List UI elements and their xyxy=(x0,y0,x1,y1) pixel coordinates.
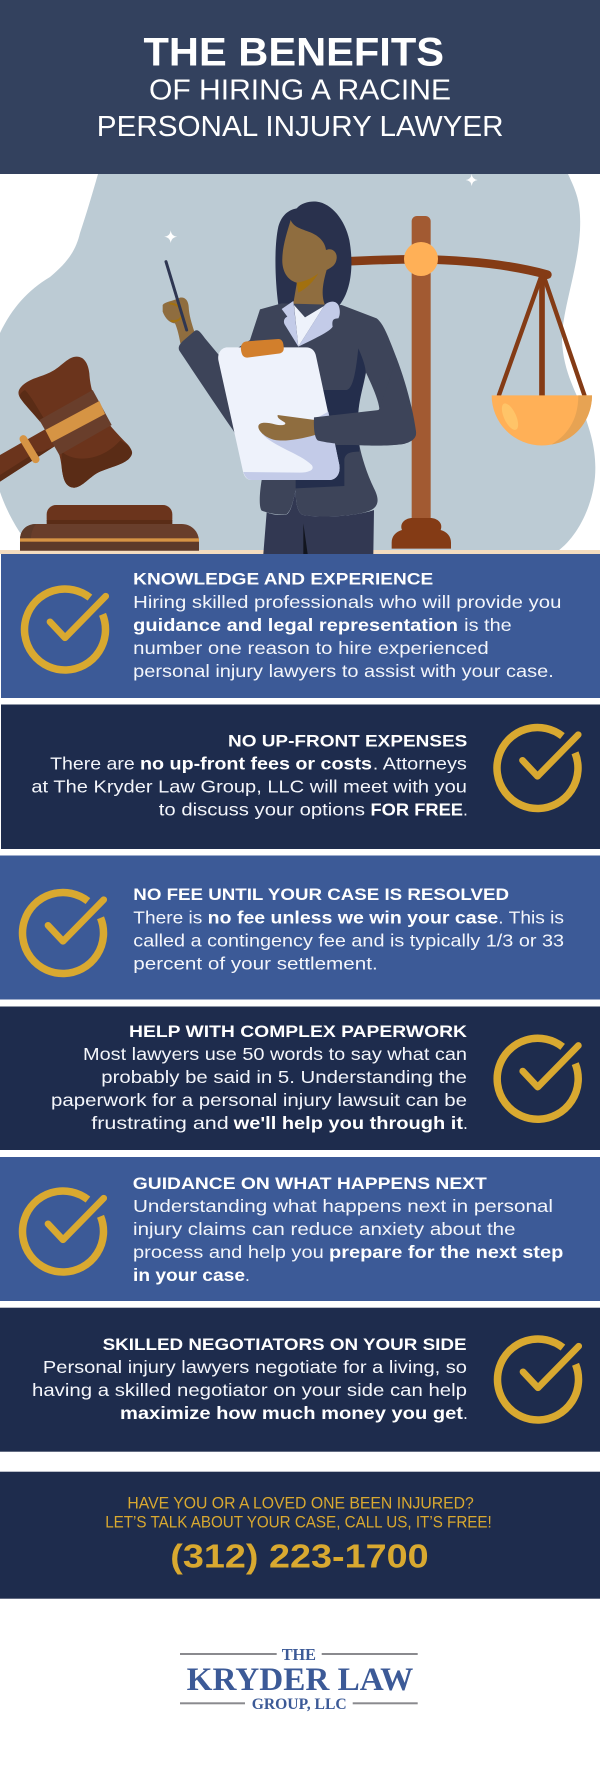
heading: GUIDANCE ON WHAT HAPPENS NEXT xyxy=(133,1174,487,1193)
logo: The Kryder Law Group: KRYDER LAW xyxy=(187,1662,413,1698)
header banner xyxy=(0,0,600,174)
icon: check circle xyxy=(497,727,578,808)
figure: lawyer with clipboard xyxy=(163,202,416,554)
panel: no up-front expenses xyxy=(1,704,600,849)
body text xyxy=(51,1044,468,1133)
icon: scales of justice xyxy=(347,216,592,549)
icon: sparkle left xyxy=(164,230,177,243)
icon: check circle xyxy=(22,892,104,973)
heading: HELP WITH COMPLEX PAPERWORK xyxy=(129,1022,468,1041)
body text: at The Kryder Law Group, LLC will meet with you xyxy=(31,777,467,797)
body text: no fee unless we win your case xyxy=(208,907,499,927)
body text: Understanding what happens next in personal xyxy=(133,1196,553,1216)
body text: . xyxy=(463,1113,468,1133)
body text: . Attorneys xyxy=(373,754,467,774)
body text: maximize how much money you get xyxy=(120,1403,463,1423)
subtitle line 1: OF HIRING A RACINE xyxy=(149,75,451,107)
body text: having a skilled negotiator on your side can help xyxy=(32,1380,467,1400)
body text: we'll help you through it xyxy=(233,1113,463,1133)
body text: frustrating and xyxy=(91,1113,229,1133)
body text xyxy=(133,592,561,681)
icon: check circle xyxy=(22,1191,104,1272)
panel: skilled negotiators xyxy=(0,1308,600,1452)
subtitle line 2: PERSONAL INJURY LAWYER xyxy=(97,111,504,143)
body text: guidance and legal representation xyxy=(133,615,458,635)
heading: SKILLED NEGOTIATORS ON YOUR SIDE xyxy=(103,1335,466,1354)
floor line xyxy=(0,550,600,554)
logo: The Kryder Law Group: THE xyxy=(282,1645,316,1664)
body text: is the xyxy=(464,615,512,635)
phone number: (312) 223-1700 xyxy=(170,1537,429,1574)
body text: paperwork for a personal injury lawsuit can be xyxy=(51,1090,467,1110)
background blob xyxy=(0,174,595,553)
logo: The Kryder Law Group: GROUP, LLC xyxy=(252,1696,347,1713)
body text: . xyxy=(245,1265,250,1285)
body text: prepare for the next step xyxy=(329,1242,563,1262)
body text: probably be said in 5. Understanding the xyxy=(101,1067,467,1087)
body text xyxy=(31,754,468,820)
body text: called a contingency fee and is typically 1/3 or 33 xyxy=(133,930,564,950)
body text xyxy=(32,1357,468,1423)
icon: check circle xyxy=(497,1339,579,1420)
call to action panel xyxy=(0,1472,600,1599)
icon: check circle xyxy=(24,589,106,670)
call to action text: LET’S TALK ABOUT YOUR CASE, CALL US, IT’S FREE! xyxy=(105,1514,492,1532)
body text: to discuss your options xyxy=(159,800,365,820)
body text: number one reason to hire experienced xyxy=(133,638,489,658)
body text: . xyxy=(463,800,468,820)
body text: Personal injury lawyers negotiate for a living, so xyxy=(43,1357,467,1377)
panel: guidance on what happens next xyxy=(0,1157,600,1301)
body text: There is xyxy=(133,907,203,927)
body text: personal injury lawyers to assist with your case. xyxy=(133,661,554,681)
body text xyxy=(133,907,564,973)
body text: no up-front fees or costs xyxy=(140,754,372,774)
panel: knowledge and experience xyxy=(1,554,600,698)
panel: no fee until resolved xyxy=(0,856,600,1000)
body text: percent of your settlement. xyxy=(133,953,378,973)
body text: . This is xyxy=(498,907,564,927)
logo: The Kryder Law Group xyxy=(180,1645,418,1713)
body text: process and help you xyxy=(133,1242,324,1262)
body text xyxy=(133,1196,563,1285)
icon: sparkle top xyxy=(466,174,478,186)
title: THE BENEFITS xyxy=(144,30,444,74)
icon: gavel xyxy=(0,357,199,551)
body text: FOR FREE xyxy=(370,800,463,820)
panel: help with complex paperwork xyxy=(0,1006,600,1150)
hero illustration xyxy=(0,174,600,554)
body text: Hiring skilled professionals who will provide you xyxy=(133,592,561,612)
call to action text: HAVE YOU OR A LOVED ONE BEEN INJURED? xyxy=(127,1495,474,1513)
body text: injury claims can reduce anxiety about the xyxy=(133,1219,516,1239)
heading: KNOWLEDGE AND EXPERIENCE xyxy=(133,569,433,588)
body text: Most lawyers use 50 words to say what can xyxy=(83,1044,467,1064)
icon: check circle xyxy=(497,1038,578,1119)
body text: There are xyxy=(50,754,135,774)
body text: . xyxy=(463,1403,468,1423)
body text: in your case xyxy=(133,1265,245,1285)
heading: NO FEE UNTIL YOUR CASE IS RESOLVED xyxy=(133,885,509,904)
call to action text xyxy=(105,1495,492,1532)
heading: NO UP-FRONT EXPENSES xyxy=(228,732,467,751)
